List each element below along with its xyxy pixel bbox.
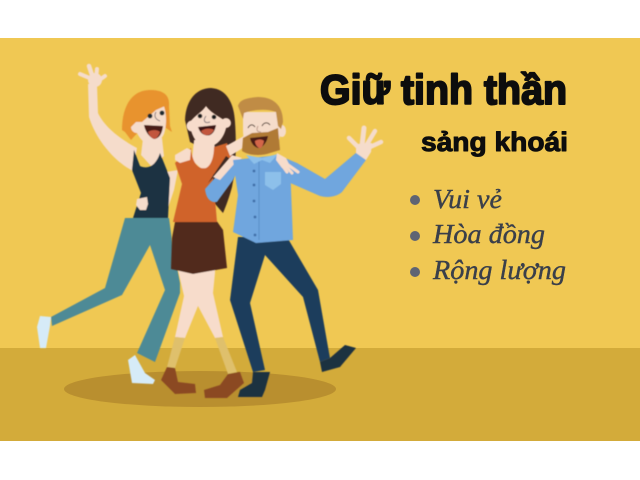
dark shoe: planted foot bbox=[238, 372, 270, 397]
floor band bbox=[0, 348, 640, 441]
orange back hair bbox=[122, 90, 172, 140]
white shoe: raised foot bbox=[37, 316, 51, 348]
laughing mouth bbox=[250, 136, 268, 148]
hair bbox=[238, 97, 283, 129]
left sock bbox=[167, 337, 185, 368]
shirt pocket bbox=[265, 172, 281, 190]
orange fringe bbox=[130, 92, 166, 128]
tongue bbox=[148, 130, 160, 139]
collar bbox=[246, 154, 278, 164]
sleeve behind woman bbox=[205, 160, 238, 202]
yellow wall background bbox=[0, 38, 640, 348]
hand on waist bbox=[136, 197, 148, 210]
bullet: Rộng lượng: Rộng lượng bbox=[432, 255, 566, 285]
woman's hand on his shoulder bbox=[276, 153, 298, 173]
neck and chest bbox=[192, 140, 216, 172]
neck bbox=[141, 138, 164, 167]
figure: woman with orange hair bbox=[37, 66, 180, 384]
ear bbox=[278, 125, 286, 137]
tongue bbox=[255, 140, 264, 148]
shirt placket and buttons bbox=[253, 160, 259, 240]
teal trousers bbox=[51, 218, 180, 362]
bullet: Hòa đồng: Hòa đồng bbox=[432, 219, 545, 249]
figure: bearded man in blue shirt bbox=[205, 97, 381, 397]
dark tank top bbox=[132, 150, 170, 218]
shirt body bbox=[233, 155, 293, 243]
hand on shoulder bbox=[175, 148, 191, 163]
orange top bbox=[173, 143, 232, 222]
figure: woman with long dark hair (back hair layer) bbox=[185, 88, 236, 213]
hair strand beside arm bbox=[208, 156, 232, 183]
crossing legs bbox=[175, 270, 223, 338]
right sleeve bbox=[285, 152, 366, 197]
face bbox=[134, 102, 166, 144]
heading: Giữ tinh thần: Giữ tinh thần bbox=[320, 66, 567, 113]
laughing mouth bbox=[144, 125, 163, 139]
waving hand bbox=[349, 128, 381, 160]
subheading: sảng khoái: sảng khoái bbox=[421, 127, 568, 157]
eyes and nose bbox=[198, 114, 216, 123]
raised arm bbox=[88, 84, 137, 171]
bullet: Vui vẻ: Vui vẻ bbox=[433, 184, 502, 214]
floor shadow ellipse bbox=[64, 371, 336, 407]
outstretched arm bbox=[226, 136, 246, 156]
open mouth bbox=[198, 125, 216, 136]
left brown shoe bbox=[161, 367, 196, 394]
skin forearm bbox=[213, 155, 242, 180]
ear bbox=[131, 121, 143, 133]
beard bbox=[242, 128, 280, 155]
figure: woman in orange top and brown skirt bbox=[161, 106, 246, 398]
brown skirt bbox=[171, 220, 227, 274]
right brown shoe bbox=[204, 372, 244, 398]
eyes and nose bbox=[148, 111, 164, 121]
navy trousers bbox=[230, 237, 330, 372]
white shoe: planted foot bbox=[128, 355, 155, 384]
closed smiling eyes and nose bbox=[248, 123, 270, 132]
waving hand bbox=[80, 66, 105, 87]
right sock bbox=[215, 337, 237, 374]
tongue bbox=[201, 129, 214, 135]
ears bbox=[186, 118, 231, 132]
dark shoe: raised foot bbox=[320, 345, 356, 372]
face bbox=[243, 112, 280, 153]
bullet list bbox=[410, 184, 566, 285]
face bbox=[190, 106, 227, 147]
back arm bbox=[160, 170, 178, 208]
